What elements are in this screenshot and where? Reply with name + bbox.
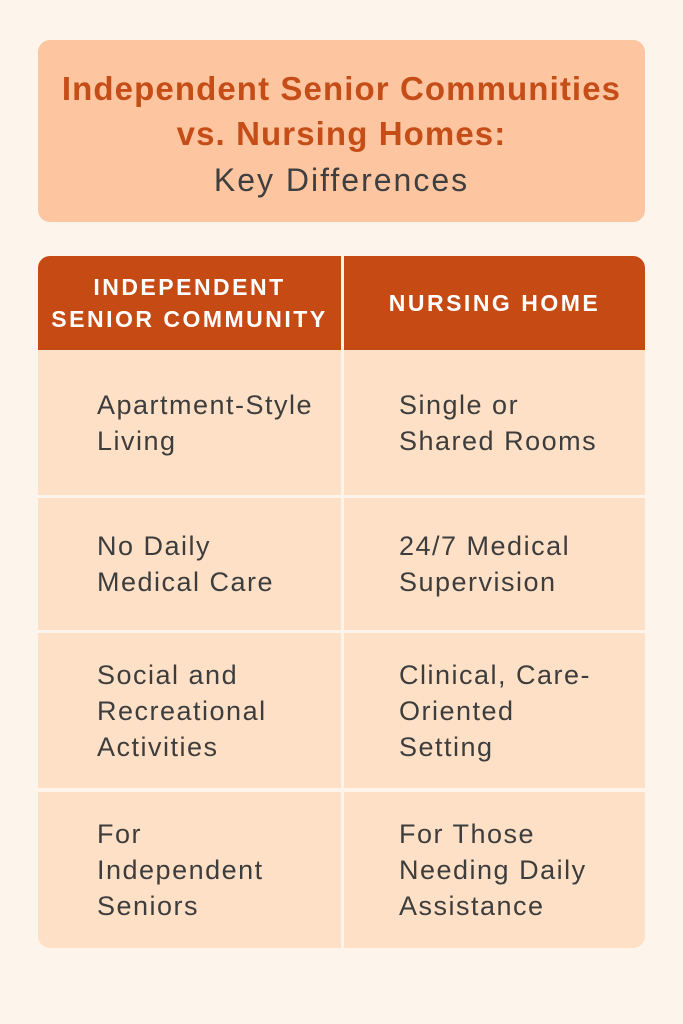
title: vs. Nursing Homes:	[177, 115, 506, 152]
row 2 right	[344, 498, 645, 630]
title: Key Differences	[214, 162, 469, 198]
row 3 right: Setting	[399, 732, 494, 762]
header: independent senior community: INDEPENDENT	[93, 274, 286, 300]
row 3 right: Oriented	[399, 696, 515, 726]
header: independent senior community: SENIOR COMMUNITY	[51, 306, 328, 332]
row 1 left: Apartment-Style	[97, 390, 313, 420]
comparison table	[38, 256, 645, 948]
row 4 right: Needing Daily	[399, 855, 587, 885]
row 3 left: Recreational	[97, 696, 267, 726]
row 4 right: For Those	[399, 819, 535, 849]
row 3 left: Social and	[97, 660, 238, 690]
row 3 left	[38, 633, 341, 788]
row 4 left: For	[97, 819, 142, 849]
row 1 right	[344, 350, 645, 495]
row 3 right	[344, 633, 645, 788]
row 2 left: Medical Care	[97, 567, 274, 597]
row 4 right	[344, 792, 645, 948]
row 1 left	[38, 350, 341, 495]
header: nursing home: NURSING HOME	[389, 290, 600, 316]
row 2 left	[38, 498, 341, 630]
row 2 right: Supervision	[399, 567, 557, 597]
title	[38, 40, 645, 222]
row 1 right: Shared Rooms	[399, 426, 597, 456]
row 4 right: Assistance	[399, 891, 545, 921]
row 4 left	[38, 792, 341, 948]
row 3 left: Activities	[97, 732, 219, 762]
row 1 right: Single or	[399, 390, 519, 420]
row 2 right: 24/7 Medical	[399, 531, 570, 561]
title: Independent Senior Communities	[62, 70, 621, 107]
row 4 left: Independent	[97, 855, 264, 885]
row 4 left: Seniors	[97, 891, 199, 921]
row 1 left: Living	[97, 426, 177, 456]
row 2 left: No Daily	[97, 531, 211, 561]
row 3 right: Clinical, Care-	[399, 660, 591, 690]
header: nursing home	[344, 256, 645, 350]
header: independent senior community	[38, 256, 341, 350]
